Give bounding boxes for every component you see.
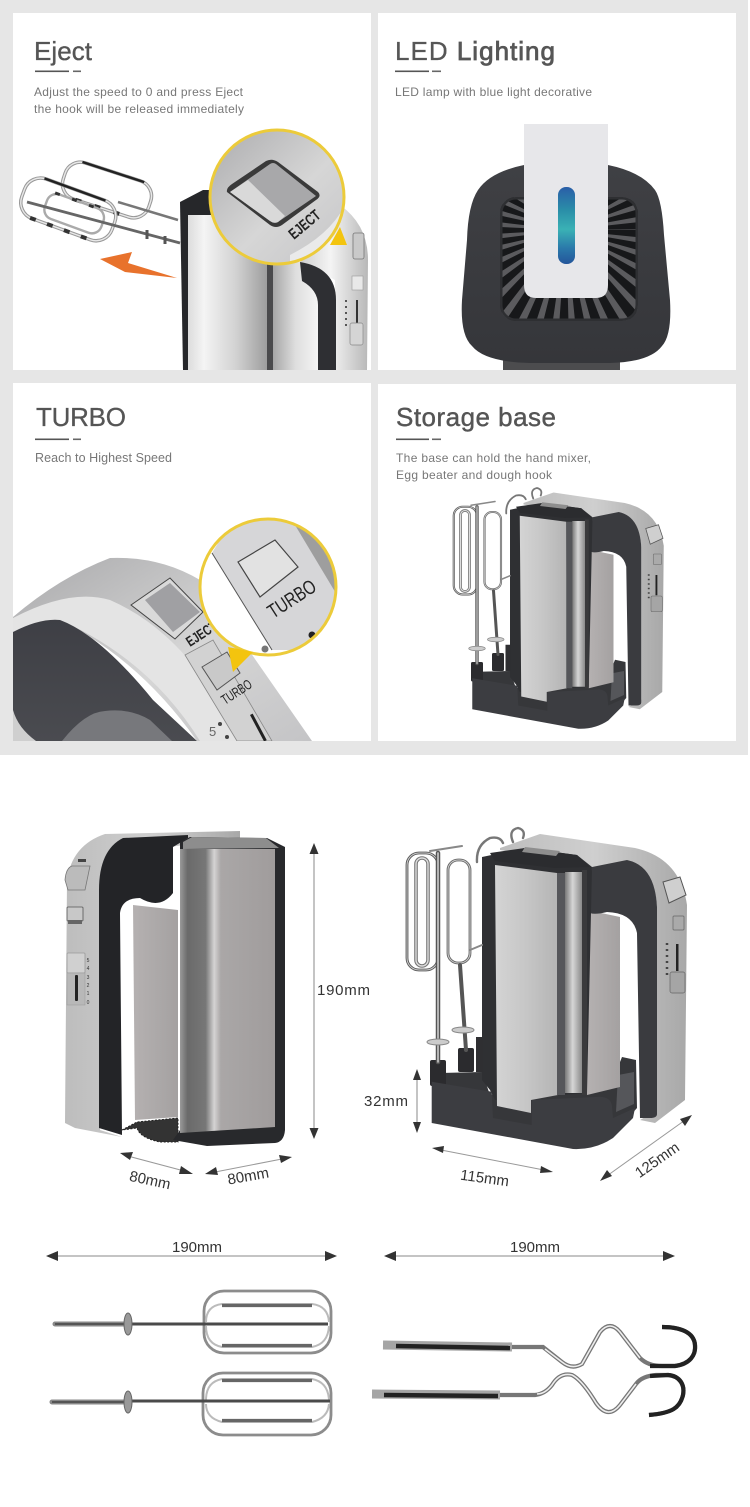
label: 32mm: 32mm	[364, 1093, 408, 1110]
icon: vent grill	[500, 197, 638, 321]
heading: LED Lighting: LED Lighting	[395, 36, 555, 66]
text: storage description	[396, 451, 591, 482]
label: 190mm beaters: 190mm	[172, 1239, 222, 1256]
mixer close-up	[13, 558, 312, 741]
label: 80mm right: 80mm	[226, 1165, 270, 1189]
mixer body close-up	[180, 190, 368, 370]
panel: eject	[13, 13, 371, 370]
callout: eject button magnified: EJECT	[285, 206, 324, 243]
mixer cord grill	[122, 1118, 178, 1142]
arrow: 190mm height	[310, 843, 318, 1139]
arrow: 125mm	[600, 1115, 692, 1181]
mixer back steel	[133, 905, 178, 1120]
text: eject description: Adjust the speed to 0 and press Eject	[34, 85, 244, 99]
heading: Eject: Eject	[34, 36, 93, 66]
panel: storage base	[378, 384, 736, 741]
label: 190mm hooks: 190mm	[510, 1239, 560, 1256]
mixer handle	[99, 835, 188, 1135]
label: 190mm: 190mm	[317, 982, 370, 999]
mixer side view with dimensions	[65, 831, 370, 1193]
mixer close-up: TURBO	[218, 676, 255, 708]
panel: turbo	[13, 383, 371, 741]
label: 125mm: 125mm	[632, 1139, 683, 1182]
mixer on base front view	[407, 828, 687, 1149]
heading: Storage base: Storage base	[396, 402, 556, 432]
arrow: 80mm left	[120, 1152, 193, 1174]
mixer on base with dimensions	[364, 828, 692, 1190]
dough hook bottom	[372, 1374, 683, 1415]
heading: TURBO: TURBO	[36, 402, 126, 432]
mixer buttons: 3	[87, 975, 90, 981]
text: LED description: LED lamp with blue light decorative	[395, 85, 592, 99]
mixer steel front	[180, 849, 275, 1133]
callout: turbo button magnified	[195, 515, 345, 672]
mixer buttons	[65, 859, 90, 1006]
mixer buttons: 0	[87, 1000, 90, 1006]
arrow: 115mm	[432, 1146, 553, 1173]
mixer top cap and black edge	[173, 837, 285, 1146]
icon: blue LED light	[558, 187, 575, 264]
mixer buttons: 1	[87, 991, 90, 997]
label: 80mm left: 80mm	[128, 1168, 172, 1193]
text: storage description: Egg beater and dough hook	[396, 468, 553, 482]
mixer silver side	[65, 831, 240, 1137]
dough hook top	[383, 1326, 695, 1367]
callout: eject button magnified	[205, 125, 350, 270]
arrow: 32mm	[413, 1069, 421, 1133]
right edge strip	[748, 0, 750, 755]
text: storage description: The base can hold the hand mixer,	[396, 451, 591, 465]
mixer close-up: EJECT	[183, 618, 220, 650]
arrow: orange eject direction	[100, 252, 177, 278]
arrow: 80mm right	[205, 1155, 292, 1175]
panel: LED lighting	[378, 13, 736, 370]
white housing	[524, 124, 608, 298]
mixer on storage base	[454, 488, 664, 729]
icon: base stand foot	[503, 360, 620, 370]
arrow: 190mm hooks	[384, 1251, 675, 1261]
dough hooks with dimension	[372, 1239, 695, 1415]
mixer buttons: 4	[87, 966, 90, 972]
mixer buttons: 2	[87, 983, 90, 989]
grey background band	[0, 0, 750, 755]
icon: whisk beaters released	[16, 158, 180, 246]
arrow: 190mm beaters	[46, 1251, 337, 1261]
label: 115mm: 115mm	[459, 1167, 510, 1190]
mixer close-up: 5	[209, 724, 216, 739]
whisk beater bottom	[52, 1373, 331, 1435]
whisk beaters with dimension	[46, 1239, 337, 1435]
whisk beater top	[55, 1291, 331, 1353]
text: eject description	[34, 85, 244, 116]
text: turbo description: Reach to Highest Speed	[35, 451, 172, 465]
mixer buttons: 5	[87, 958, 90, 964]
text: eject description: the hook will be released immediately	[34, 102, 244, 116]
callout: turbo button magnified: TURBO	[263, 575, 320, 623]
mixer bottom with vents	[462, 165, 670, 363]
